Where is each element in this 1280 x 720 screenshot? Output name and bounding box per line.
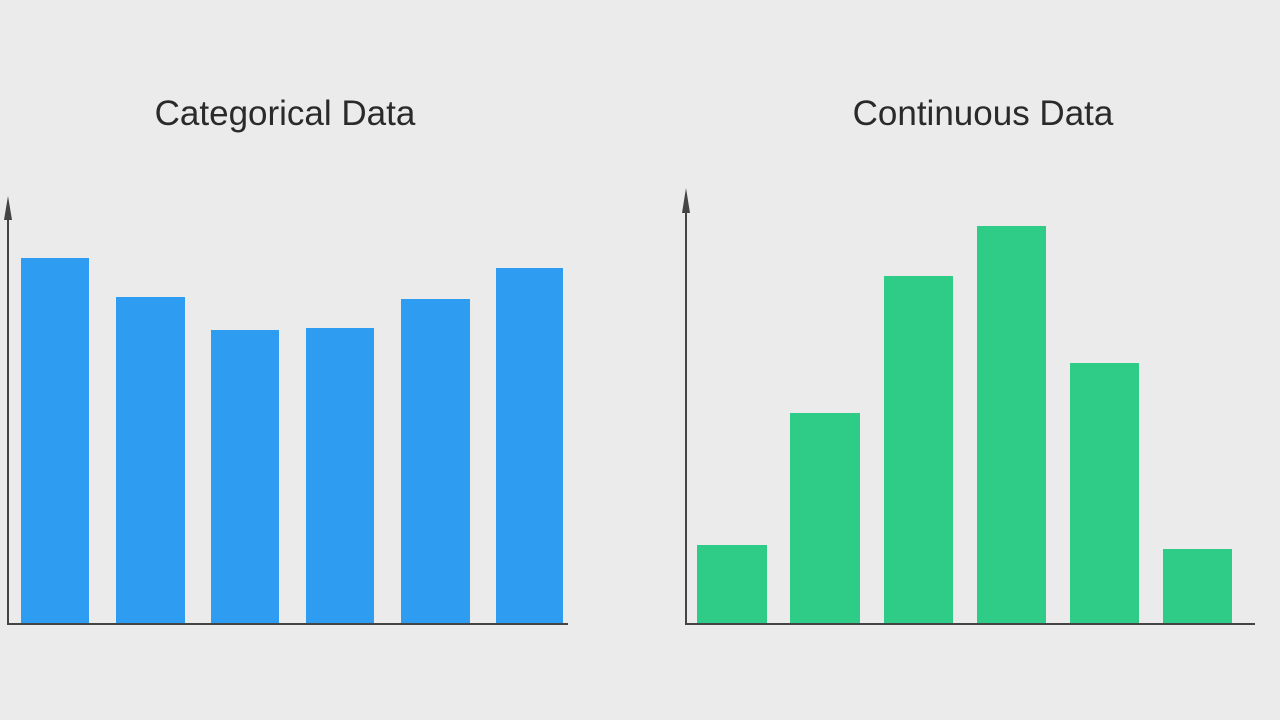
axes: continuous xyxy=(685,205,1255,625)
bars: blue xyxy=(21,258,563,623)
chart: categorical bar chart xyxy=(4,196,568,625)
axes: categorical xyxy=(7,210,568,625)
chart: continuous histogram xyxy=(682,188,1255,625)
title: Categorical Data: Categorical Data xyxy=(155,94,416,133)
bars: green xyxy=(697,226,1232,623)
title: Continuous Data: Continuous Data xyxy=(853,94,1114,133)
